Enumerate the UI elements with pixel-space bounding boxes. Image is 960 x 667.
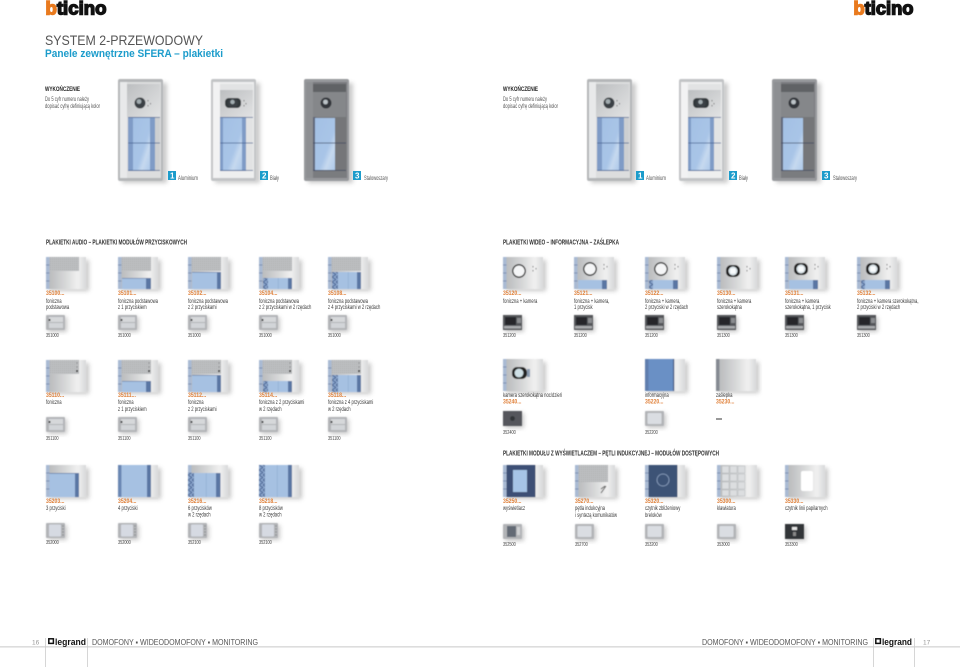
item 35203: 352000 — [46, 539, 59, 546]
item 35118: 351100 — [328, 435, 341, 442]
product row: button modules — [46, 465, 302, 546]
finish label 3: 3 — [824, 172, 829, 180]
finish label 1: 1 — [170, 172, 175, 180]
item 35130 — [717, 257, 760, 339]
item 35218: 35218... — [259, 499, 278, 505]
product row: audio — [46, 360, 373, 442]
item 35118 — [328, 360, 373, 442]
item 35300: 353000 — [717, 541, 730, 548]
item 35104 — [259, 257, 311, 339]
item 35104: foniczna podstawowa — [259, 298, 299, 305]
finish label 2: 2 — [731, 172, 736, 180]
page number 17: 17 — [923, 640, 931, 646]
product row: video — [503, 257, 918, 339]
item 35270: 352700 — [575, 541, 588, 548]
item 35102: 351000 — [188, 332, 201, 339]
item 35132: 35132... — [857, 291, 876, 297]
item 35122: 351200 — [645, 332, 658, 339]
item 35204: 35204... — [118, 499, 137, 505]
item 35100 — [46, 257, 89, 339]
item 35204 — [118, 465, 161, 546]
item 35218: w 2 rzędach — [259, 512, 282, 519]
item 35108: 351000 — [328, 332, 341, 339]
item 35111: 351100 — [118, 435, 131, 442]
item 35118: w 2 rzędach — [328, 406, 351, 413]
item 35111: foniczna — [118, 399, 134, 406]
heading: audio plates: PLAKIETKI AUDIO – PLAKIETKI MODUŁÓW PRZYCISKOWYCH — [46, 238, 187, 246]
finish note: dopisać cyfrę definiującą kolor — [503, 104, 558, 110]
finish label 3: Stalowoszary — [833, 176, 857, 182]
item 35100: podstawowa — [46, 304, 69, 311]
item 35112 — [188, 360, 231, 442]
item 35218: 352100 — [259, 539, 272, 546]
item 35100: 351000 — [46, 332, 59, 339]
item 35250: 35250... — [503, 499, 522, 505]
item 35122: foniczna + kamera, — [645, 298, 680, 305]
item 35102: z 2 przyciskami — [188, 304, 217, 311]
item 35330 — [785, 465, 828, 548]
item 35101: foniczna podstawowa — [118, 298, 158, 305]
item 35270: 35270... — [575, 499, 594, 505]
item 35104: 35104... — [259, 291, 278, 297]
item 35330: 35330... — [785, 499, 804, 505]
logo: legrand left: legrand — [55, 637, 86, 648]
item 35114: 35114... — [259, 393, 278, 399]
item 35122 — [645, 257, 688, 339]
item 35111: z 1 przyciskiem — [118, 406, 147, 413]
item 35320: 35320... — [645, 499, 664, 505]
item 35120 — [503, 257, 546, 339]
item 35216: 6 przycisków — [188, 505, 212, 512]
item 35230: 35230... — [716, 399, 735, 406]
finish label 2 — [260, 171, 279, 182]
item 35132: foniczna + kamera szerokokątna, — [857, 298, 918, 305]
item 35270: pętla indukcyjna — [575, 505, 605, 512]
item 35132: 2 przyciski w 2 rzędach — [857, 304, 900, 311]
item 35114: w 2 rzędach — [259, 406, 282, 413]
item 35101: z 1 przyciskiem — [118, 304, 147, 311]
item 35216 — [188, 465, 231, 546]
item 35300: 35300... — [717, 499, 736, 505]
item 35220: informacyjna — [645, 392, 669, 399]
item 35320: breloków — [645, 512, 662, 519]
item 35330: czytnik linii papilarnych — [785, 505, 828, 512]
footer tagline right: DOMOFONY ▪ WIDEODOMOFONY ▪ MONITORING — [702, 638, 868, 647]
item 35216: w 2 rzędach — [188, 512, 211, 519]
item 35110: 351100 — [46, 435, 59, 442]
finish note: Do 5 cyfr numeru należy — [503, 97, 547, 103]
finish label 1: Aluminium — [646, 176, 666, 182]
finish label 3: 3 — [355, 172, 360, 180]
item 35203: 3 przyciski — [46, 505, 66, 512]
finish label 2 — [729, 171, 748, 182]
item 35203: 35203... — [46, 499, 65, 505]
item 35131: foniczna + kamera — [785, 298, 819, 305]
item 35270: i syntezą komunikatów — [575, 512, 617, 519]
item 35118: 35118... — [328, 393, 347, 399]
finish label 1: Aluminium — [178, 176, 198, 182]
finish label 1 — [636, 171, 666, 182]
item 35130: 351300 — [717, 332, 730, 339]
item 35130: szerokokątna — [717, 304, 742, 311]
finish label 2: 2 — [262, 172, 267, 180]
item 35204: 352000 — [118, 539, 131, 546]
finish note — [45, 84, 100, 110]
finish label 1 — [168, 171, 198, 182]
item 35230 — [716, 359, 759, 420]
finish label 3 — [822, 171, 857, 182]
item 35122: 2 przyciski w 2 rzędach — [645, 304, 688, 311]
item 35118: foniczna z 4 przyciskami — [328, 399, 373, 406]
finish note: Do 5 cyfr numeru należy — [45, 97, 89, 103]
panel: finishes left — [45, 79, 388, 183]
finish label 3 — [353, 171, 388, 182]
item 35101: 35101... — [118, 291, 137, 297]
item 35320: 353200 — [645, 541, 658, 548]
item 35132 — [857, 257, 918, 339]
finish note: WYKOŃCZENIE — [503, 84, 539, 93]
finish label 2: Biały — [739, 176, 748, 182]
panel: finishes right — [503, 79, 857, 183]
item 35108: z 4 przyciskami w 2 rzędach — [328, 304, 380, 311]
item 35121 — [574, 257, 617, 339]
item 35110: 35110... — [46, 393, 65, 399]
product row: camera, information, blank — [503, 359, 759, 436]
item 35320: czytnik zbliżeniowy — [645, 505, 681, 512]
item 35114: foniczna z 2 przyciskami — [259, 399, 304, 406]
heading: video plates: PLAKIETKI WIDEO – INFORMACYJNA – ZAŚLEPKA — [503, 238, 619, 246]
finish label 2: Biały — [270, 176, 279, 182]
item 35104: 351000 — [259, 332, 272, 339]
item 35111: 35111... — [118, 393, 136, 399]
item 35300 — [717, 465, 760, 548]
item 35131: szerokokątna, 1 przycisk — [785, 304, 831, 311]
item 35121: 35121... — [574, 291, 593, 297]
item 35112: z 2 przyciskami — [188, 406, 217, 413]
item 35240: 35240... — [503, 399, 522, 406]
item 35121: 1 przycisk — [574, 304, 593, 311]
panel photo: aluminium — [587, 79, 636, 183]
item 35270 — [575, 465, 618, 548]
item 35240: 352400 — [503, 429, 516, 436]
item 35250: wyświetlacz — [503, 505, 525, 512]
footer — [0, 637, 960, 667]
item 35100: foniczna — [46, 298, 62, 305]
item 35230: zaślepka — [716, 392, 733, 399]
item 35111 — [118, 360, 161, 442]
item 35110: foniczna — [46, 399, 62, 406]
item 35114: 351100 — [259, 435, 272, 442]
subtitle: Panele zewnętrzne SFERA – plakietki — [45, 48, 223, 60]
heading: display, induction loop, access modules: PLAKIETKI MODUŁU Z WYŚWIETLACZEM – PĘTLI INDUKCYJNEJ – MODUŁÓW DOSTĘPOWYCH — [503, 448, 719, 458]
item 35112: foniczna — [188, 399, 204, 406]
item 35101: 351000 — [118, 332, 131, 339]
item 35216: 35216... — [188, 499, 207, 505]
item 35102: 35102... — [188, 291, 207, 297]
item 35218: 8 przycisków — [259, 505, 283, 512]
title block — [45, 32, 223, 60]
item 35131 — [785, 257, 831, 339]
item 35250 — [503, 465, 546, 548]
item 35104: z 2 przyciskami w 2 rzędach — [259, 304, 311, 311]
item 35102: foniczna podstawowa — [188, 298, 228, 305]
item 35220 — [645, 359, 688, 436]
item 35112: 351100 — [188, 435, 201, 442]
item 35320 — [645, 465, 688, 548]
item 35101 — [118, 257, 161, 339]
item 35132: 351300 — [857, 332, 870, 339]
item 35240: kamera szerokokątna noc/dzień — [503, 392, 562, 399]
logo: legrand right: legrand — [882, 637, 912, 648]
item 35100: 35100... — [46, 291, 65, 297]
item 35218 — [259, 465, 302, 546]
finish note: dopisać cyfrę definiującą kolor — [45, 104, 100, 110]
item 35120: 351200 — [503, 332, 516, 339]
item 35108: foniczna podstawowa — [328, 298, 368, 305]
item 35110 — [46, 360, 89, 442]
panel photo: white — [679, 79, 728, 183]
product row: audio basic — [46, 257, 380, 339]
panel photo: white — [211, 79, 260, 183]
title: SYSTEM 2-PRZEWODOWY — [45, 32, 204, 48]
item 35122: 35122... — [645, 291, 664, 297]
item 35250: 352500 — [503, 541, 516, 548]
item 35220: 35220... — [645, 399, 664, 406]
item 35108 — [328, 257, 380, 339]
item 35330: 353300 — [785, 541, 798, 548]
item 35114 — [259, 360, 304, 442]
item 35300: klawiatura — [717, 505, 736, 512]
item 35131: 351300 — [785, 332, 798, 339]
product row: display and access modules — [503, 465, 828, 548]
item 35112: 35112... — [188, 393, 207, 399]
finish note: WYKOŃCZENIE — [45, 84, 81, 93]
item 35120: foniczna + kamera — [503, 298, 537, 305]
item 35203 — [46, 465, 89, 546]
item 35121: foniczna + kamera, — [574, 298, 609, 305]
item 35102 — [188, 257, 231, 339]
item 35216: 352100 — [188, 539, 201, 546]
item 35108: 35108... — [328, 291, 347, 297]
item 35240 — [503, 359, 562, 436]
panel photo: aluminium — [118, 79, 167, 183]
item 35131: 35131... — [785, 291, 804, 297]
item 35220: 352200 — [645, 429, 658, 436]
item 35130: 35130... — [717, 291, 736, 297]
panel photo: steel — [772, 79, 821, 183]
item 35204: 4 przyciski — [118, 505, 138, 512]
finish note — [503, 84, 558, 110]
item 35121: 351200 — [574, 332, 587, 339]
item 35120: 35120... — [503, 291, 522, 297]
footer tagline left: DOMOFONY ▪ WIDEODOMOFONY ▪ MONITORING — [92, 638, 258, 647]
finish label 3: Stalowoszary — [364, 176, 388, 182]
item 35130: foniczna + kamera — [717, 298, 751, 305]
page number 16: 16 — [32, 640, 40, 646]
finish label 1: 1 — [638, 172, 643, 180]
panel photo: steel — [304, 79, 353, 183]
